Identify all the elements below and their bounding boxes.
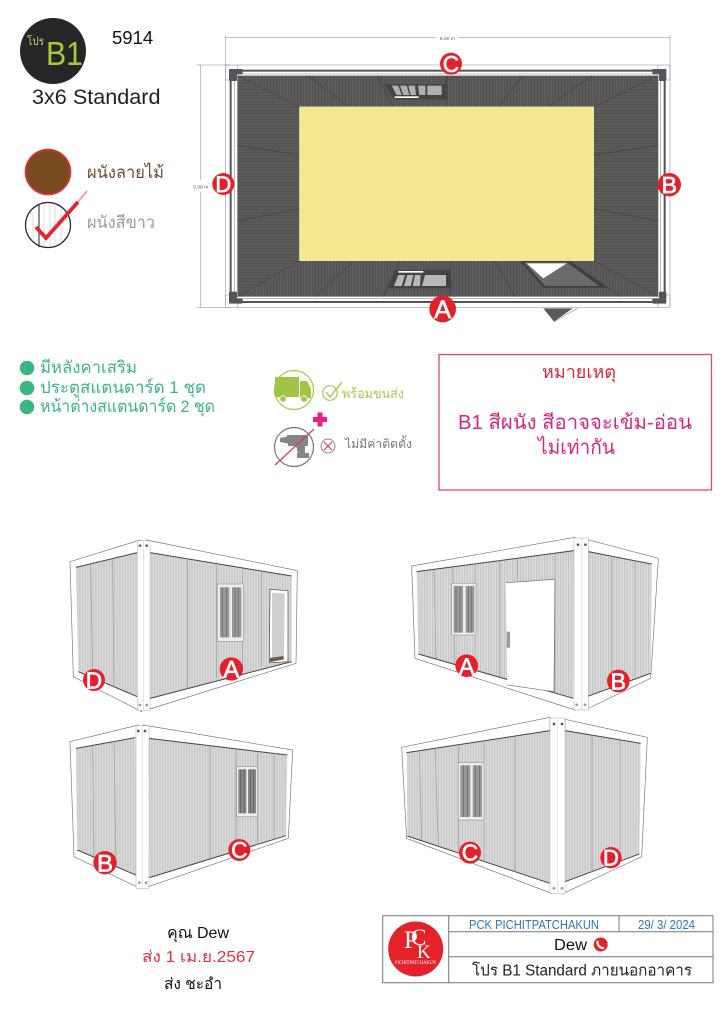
door opening <box>269 589 288 663</box>
promo badge B1: B1 <box>46 35 83 72</box>
marker A <box>220 657 243 684</box>
window <box>217 584 243 641</box>
customer and delivery details <box>142 925 255 993</box>
marker B: B <box>662 172 677 198</box>
marker B <box>93 850 117 877</box>
company logo: K <box>417 942 431 963</box>
marker B <box>607 669 630 695</box>
marker B: B <box>97 850 113 877</box>
title block <box>383 916 713 983</box>
title block: 29/ 3/ 2024 <box>638 918 695 932</box>
floor <box>299 107 594 261</box>
bottom window <box>386 270 452 288</box>
company logo <box>388 922 443 976</box>
no installation fee label <box>321 435 412 453</box>
feature list: ประตูสแตนดาร์ด 1 ชุด <box>40 378 206 398</box>
window <box>237 767 257 817</box>
option: white wall, selected: ผนังสีขาว <box>87 213 155 232</box>
dimension lines <box>197 35 670 307</box>
door opening <box>520 261 608 288</box>
outer frame <box>230 70 665 303</box>
icon: crossed-out drill <box>274 428 314 466</box>
title block: โปร B1 Standard ภายนอกอาคาร <box>472 962 692 980</box>
container view: sides A and B <box>412 537 658 710</box>
code number: 5914 <box>112 27 153 48</box>
marker A: A <box>459 653 475 679</box>
floor plan: 3.00 m <box>193 184 208 190</box>
title block: PCK PICHITPATCHAKUN <box>469 918 599 932</box>
note box: หมายเหตุ <box>542 362 616 383</box>
marker C: C <box>231 837 248 863</box>
note box: ไม่เท่ากัน <box>536 436 615 459</box>
marker D: D <box>603 846 619 871</box>
note box: B1 สีผนัง สีอาจจะเข้ม-อ่อน <box>458 412 692 434</box>
icon: plus <box>313 412 327 426</box>
container view: sides D and A <box>70 540 297 712</box>
wall panels seen from above <box>237 76 658 297</box>
ready to ship label <box>323 382 404 401</box>
ready to ship label: พร้อมขนส่ง <box>342 386 404 401</box>
no installation fee label: ไม่มีค่าติดตั้ง <box>344 435 412 451</box>
marker C: C <box>462 840 478 866</box>
marker D: D <box>215 172 231 197</box>
icon: phone <box>594 938 608 952</box>
marker A <box>455 653 478 679</box>
company logo: C <box>411 925 426 950</box>
marker A <box>429 296 456 324</box>
promo badge B1 <box>20 18 86 84</box>
marker C: C <box>443 51 459 77</box>
feature list <box>20 358 215 417</box>
window <box>458 763 484 820</box>
container view: sides B and C <box>70 725 293 888</box>
window <box>452 583 476 635</box>
model title: 3x6 Standard <box>32 84 160 109</box>
company logo: P <box>404 927 418 954</box>
door <box>506 579 555 692</box>
customer and delivery details: ส่ง 1 เม.ย.2567 <box>142 949 255 966</box>
feature list: หน้าต่างสแตนดาร์ด 2 ชุด <box>40 397 215 417</box>
marker A: A <box>223 657 239 684</box>
note box <box>439 354 712 490</box>
option: wood wall: ผนังลายไม้ <box>87 162 164 182</box>
marker A: A <box>434 296 451 324</box>
floor plan <box>193 35 681 324</box>
option: wood wall <box>26 150 164 194</box>
customer and delivery details: ส่ง ชะอำ <box>164 976 222 993</box>
title block: Dew <box>554 937 588 954</box>
door leaf <box>543 308 577 322</box>
floor plan: 6.00 m <box>440 36 455 42</box>
company logo: PICHITPATCHAKUN <box>395 961 436 966</box>
top window <box>384 84 447 99</box>
promo badge B1: โปร <box>27 34 44 48</box>
feature list: มีหลังคาเสริม <box>40 358 137 377</box>
option: white wall, selected <box>26 191 155 248</box>
icon: delivery truck <box>274 370 314 410</box>
marker B: B <box>611 669 626 695</box>
customer and delivery details: คุณ Dew <box>167 925 229 943</box>
marker D: D <box>86 667 102 693</box>
marker B <box>658 172 681 198</box>
container view: sides C and D <box>402 717 647 893</box>
